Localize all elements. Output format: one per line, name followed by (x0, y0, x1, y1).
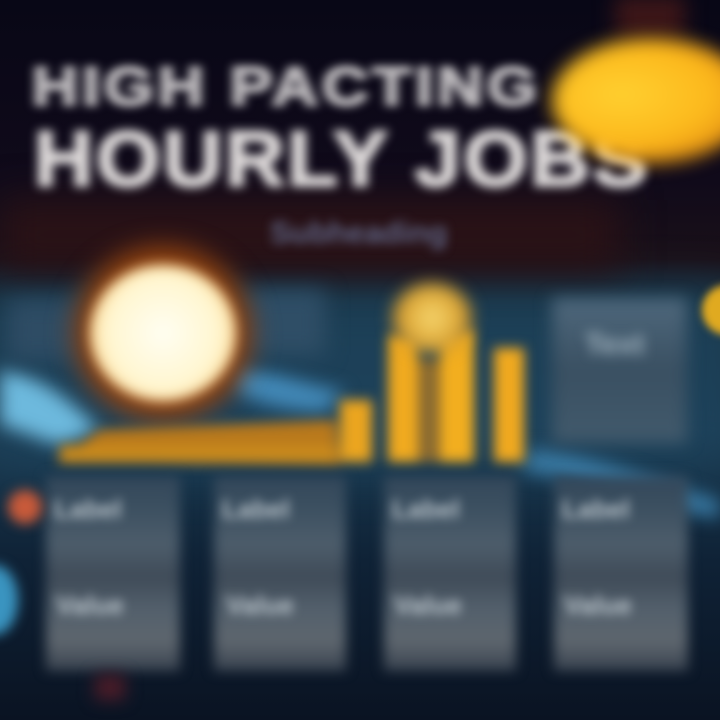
lamp glow (538, 0, 720, 178)
right panel text: Text (585, 328, 644, 361)
title line 1: HIGH PACTING (32, 56, 541, 117)
card 3 (384, 476, 516, 671)
icon: red mark bottom (95, 675, 125, 700)
right panel (552, 298, 687, 443)
card 3 value: Value (394, 590, 462, 620)
panel: upper middle (245, 290, 325, 355)
chart peak glow (392, 283, 472, 353)
bar 1 (340, 400, 372, 462)
card 1 (46, 476, 180, 671)
bar chart (50, 323, 534, 474)
card 4 heading: Label (562, 494, 630, 524)
card 2 value: Value (226, 590, 294, 620)
title line 2: HOURLY JOBS (34, 116, 650, 202)
sun core (90, 265, 236, 401)
bar 3 (440, 330, 474, 462)
card 4 value: Value (564, 590, 632, 620)
background glow (0, 290, 720, 470)
card 3 heading: Label (392, 494, 460, 524)
subtitle: Subheading (270, 215, 447, 250)
card 2 heading: Label (222, 494, 290, 524)
lamp top (615, 0, 685, 36)
lamp bulb (552, 38, 720, 163)
card 4 (554, 476, 688, 671)
icon: blue ring (0, 565, 18, 635)
bar 2 (388, 335, 418, 462)
title (27, 56, 653, 202)
cards row (39, 469, 695, 676)
panel: upper left (8, 300, 80, 360)
red haze behind title (0, 200, 620, 270)
icon: orange dot (8, 490, 42, 524)
card 1 value: Value (56, 590, 124, 620)
icon: glowing sun (58, 230, 268, 430)
bar 4 (494, 348, 524, 462)
icon: yellow dot right edge (702, 285, 720, 335)
card 1 heading: Label (54, 494, 122, 524)
light wave (0, 360, 720, 528)
sun halo (68, 243, 258, 423)
low baseline bars (55, 420, 340, 465)
card 2 (214, 476, 346, 671)
bar gap fill (418, 360, 440, 462)
